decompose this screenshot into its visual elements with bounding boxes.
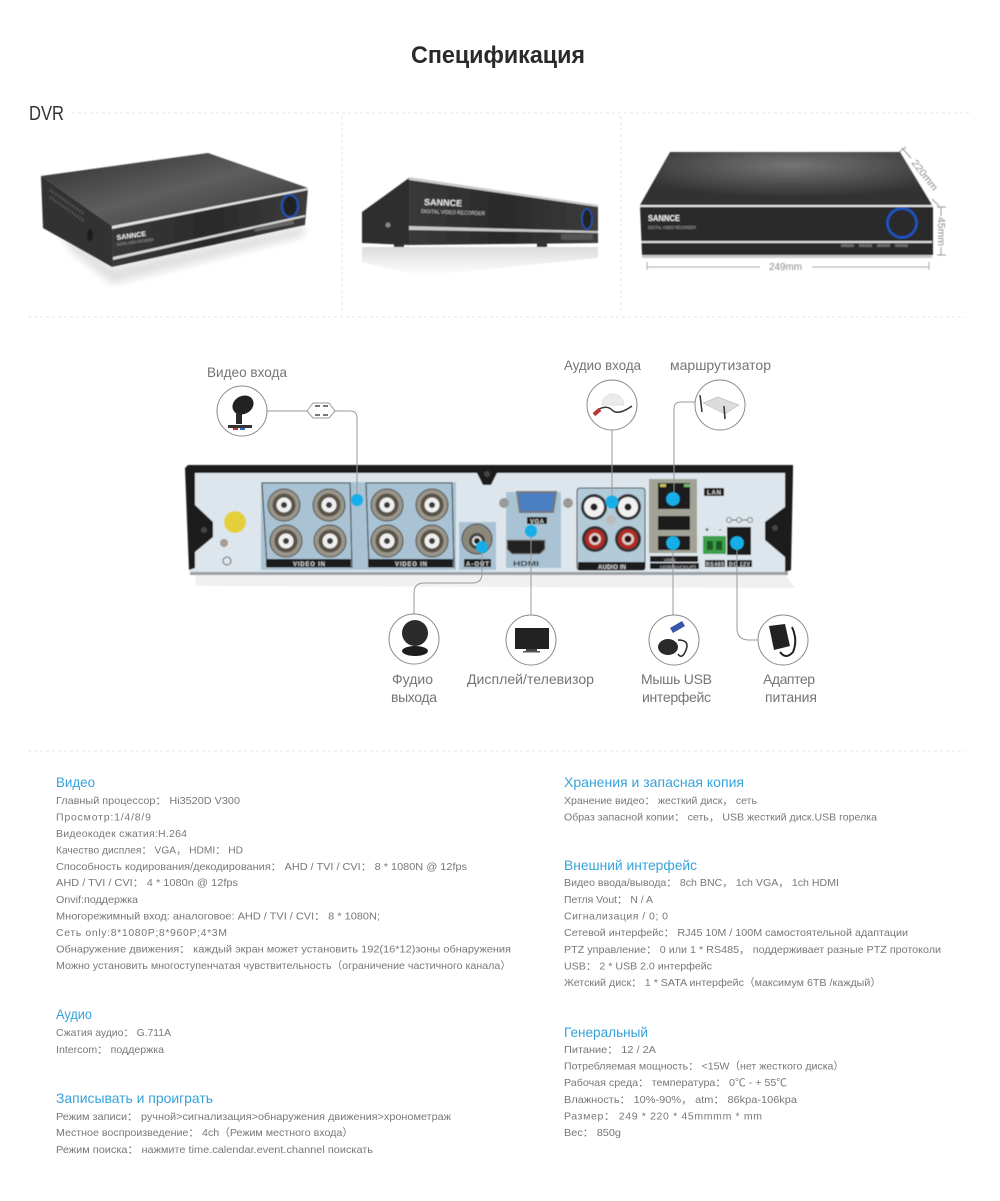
text block: recording and playback xyxy=(56,1090,451,1156)
dimension: 249mm: 249mm xyxy=(769,262,802,273)
connector lines xyxy=(267,402,758,640)
icon: microphone xyxy=(587,380,637,430)
icon: camera xyxy=(217,386,267,436)
A-OUT port xyxy=(459,522,496,570)
label: power adapter: питания xyxy=(765,689,817,705)
label: audio input: Аудио входа xyxy=(564,357,641,373)
RS485 and DC 12V ports: + xyxy=(705,527,709,534)
label: USB mouse: интерфейс xyxy=(642,689,711,705)
text block: video: Просмотр:1/4/8/9 xyxy=(56,812,151,824)
label: USB mouse: Мышь USB xyxy=(641,671,712,687)
icon: display xyxy=(506,615,556,665)
audio in ports xyxy=(577,488,645,571)
RS485 and DC 12V ports: - xyxy=(719,527,722,534)
audio in ports: AUDIO IN xyxy=(598,565,626,571)
panel: DVR front view with dimensions xyxy=(640,147,946,273)
heading: DVR: DVR xyxy=(29,103,64,125)
text block: recording and playback: Режим записи： ручной>сигнализация>обнаружения движения>хронометраж xyxy=(56,1111,451,1123)
video in group 2: VIDEO IN xyxy=(395,562,427,568)
text block: video: Видео xyxy=(56,774,95,790)
warranty sticker xyxy=(220,511,246,565)
icon: power adapter xyxy=(758,615,808,665)
title: Спецификация xyxy=(411,42,585,69)
text block: external interfaces: Сетевой интерфейс： RJ45 10M / 100M самостоятельной адаптации xyxy=(564,927,908,939)
text block: video: Обнаружение движения： каждый экран может установить 192(16*12)зоны обнаружения xyxy=(56,944,511,956)
video in group 1 xyxy=(262,483,352,568)
text block: storage and backup: Хранение видео： жесткий диск， сеть xyxy=(564,795,758,807)
dimension: 45mm xyxy=(935,207,946,255)
text block: recording and playback: Записывать и проиграть xyxy=(56,1090,213,1106)
text block: general: Генеральный xyxy=(564,1024,648,1040)
text block: external interfaces xyxy=(564,857,941,989)
panel: DVR front view with dimensions: DIGITAL VIDEO RECORDER xyxy=(648,225,697,230)
text block: general xyxy=(564,1024,844,1139)
text block: external interfaces: Видео ввода/вывода： 8ch BNC， 1ch VGA， 1ch HDMI xyxy=(564,877,839,889)
text block: external interfaces: Внешний интерфейс xyxy=(564,857,697,873)
text block: general: Влажность： 10%-90%， atm： 86kpa-106kpa xyxy=(564,1094,797,1106)
video in group 2 xyxy=(366,483,454,568)
dimension: 220mm: 220mm xyxy=(909,158,939,193)
RS485 and DC 12V ports: RS485 xyxy=(706,562,724,568)
text block: external interfaces: Петля Vout： N / A xyxy=(564,894,653,906)
text block: audio xyxy=(56,1006,171,1056)
text block: general: Рабочая среда： температура： 0℃ - + 55℃ xyxy=(564,1077,788,1089)
text block: video: Главный процессор： Hi3520D V300 xyxy=(56,795,240,807)
text block: storage and backup: Образ запасной копии： сеть， USB жесткий диск.USB горелка xyxy=(564,812,877,824)
panel: DVR side view: DIGITAL VIDEO RECORDER xyxy=(421,209,485,217)
text block: recording and playback: Режим поиска： нажмите time.calendar.event.channel поискать xyxy=(56,1144,374,1156)
text block: video: Многорежимный вход: аналоговое: AHD / TVI / CVI： 8 * 1080N; xyxy=(56,910,380,922)
panel: DVR side view: SANNCE xyxy=(424,197,462,208)
port markers xyxy=(351,492,744,553)
dimension: 220mm xyxy=(899,147,939,206)
panel: DVR front view with dimensions: SANNCE xyxy=(648,213,680,223)
LAN and USB ports: LAN xyxy=(707,490,721,496)
text block: general: Потребляемая мощность： <15W（нет жесткого диска） xyxy=(564,1060,844,1072)
LAN and USB ports xyxy=(649,479,724,570)
RS485 and DC 12V ports: DC 12V xyxy=(729,562,751,568)
icon: router xyxy=(695,380,745,430)
label: video input: Видео входа xyxy=(207,364,287,380)
VGA and HDMI ports: VGA xyxy=(530,520,545,526)
text block: audio: Аудио xyxy=(56,1006,92,1022)
text block: video: AHD / TVI / CVI： 4 * 1080n @ 12fps xyxy=(56,877,238,889)
panel: DVR perspective view: SANNCE xyxy=(116,231,147,242)
text block: storage and backup: Хранения и запасная копия xyxy=(564,774,744,790)
LAN and USB ports: USB1 xyxy=(664,558,676,562)
text block: general: Вес： 850g xyxy=(564,1127,621,1139)
dimension: 249mm xyxy=(647,262,929,273)
text block: external interfaces: USB： 2 * USB 2.0 интерфейс xyxy=(564,960,712,972)
text block: general: Питание： 12 / 2A xyxy=(564,1044,656,1056)
rear frame xyxy=(185,465,793,572)
A-OUT port: A-OUT xyxy=(466,562,489,568)
label: router: маршрутизатор xyxy=(670,357,771,373)
text block: video: Качество дисплея： VGA， HDMI： HD xyxy=(56,844,243,856)
text block: audio: Сжатия аудио： G.711A xyxy=(56,1027,171,1039)
panel: DVR perspective view: DIGITAL VIDEO RECORDER xyxy=(116,237,154,247)
label: audio output: Фудио xyxy=(392,671,433,687)
text block: video: Видеокодек сжатия:H.264 xyxy=(56,828,187,840)
text block: video xyxy=(56,774,511,972)
VGA and HDMI ports xyxy=(499,492,573,568)
panel: DVR rear connection diagram xyxy=(185,465,795,588)
LAN and USB ports: USB(BACKUP) xyxy=(660,564,697,570)
text block: external interfaces: Жетский диск： 1 * SATA интерфейс（максимум 6TB /каждый） xyxy=(564,977,881,989)
text block: storage and backup xyxy=(564,774,877,824)
VGA and HDMI ports: HDMI xyxy=(513,561,539,568)
text block: external interfaces: Сигнализация / 0; 0 xyxy=(564,910,668,922)
dimension: 45mm: 45mm xyxy=(935,217,946,246)
text block: video: Способность кодирования/декодирования： AHD / TVI / CVI： 8 * 1080N @ 12fps xyxy=(56,861,467,873)
text block: general: Размер： 249 * 220 * 45mmmm * mm xyxy=(564,1110,762,1122)
text block: video: Onvif:поддержка xyxy=(56,894,138,906)
video in group 1: VIDEO IN xyxy=(293,562,325,568)
rear panel plate xyxy=(190,470,788,573)
label: power adapter: Адаптер xyxy=(763,671,815,687)
panel: DVR side view xyxy=(362,177,598,276)
icon: mouse and USB xyxy=(649,615,699,665)
text block: audio: Intercom： поддержка xyxy=(56,1044,164,1056)
panel: DVR perspective view xyxy=(41,153,308,284)
text block: video: Сеть only:8*1080P;8*960P;4*3M xyxy=(56,927,227,939)
icon: speaker xyxy=(389,614,439,664)
text block: recording and playback: Местное воспроизведение： 4ch（Режим местного входа） xyxy=(56,1127,353,1139)
label: display: Дисплей/телевизор xyxy=(467,671,594,687)
text block: video: Можно установить многоступенчатая чувствительность（ограничение частичного канала） xyxy=(56,960,511,972)
RS485 and DC 12V ports xyxy=(703,518,752,568)
label: audio output: выхода xyxy=(391,689,437,705)
text block: external interfaces: PTZ управление： 0 или 1 * RS485， поддерживает разные PTZ протоколи xyxy=(564,944,941,956)
